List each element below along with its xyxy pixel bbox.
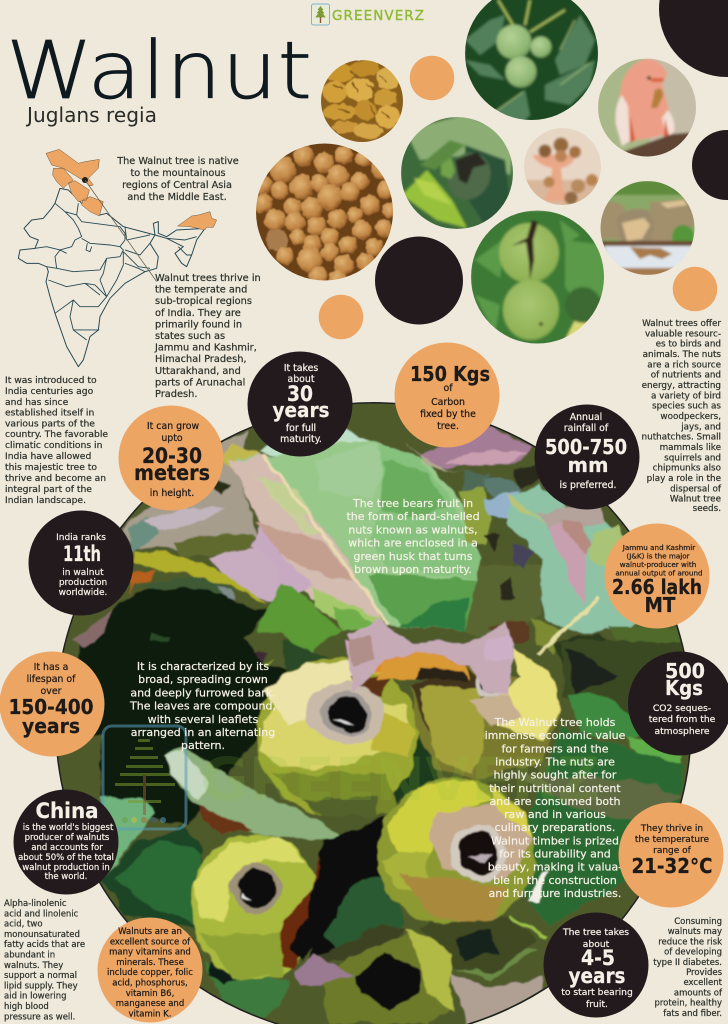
text: economic value: industry. The nuts are (495, 756, 615, 768)
text: introduced to India: Indian landscape. (5, 495, 86, 506)
text: economic value: and are consumed both (490, 795, 620, 808)
text: temperate regions: Jammu and Kashmir, (154, 343, 257, 354)
text: diabetes and nutrition (653, 917, 723, 1019)
text: diabetes and nutrition: of developing (664, 948, 722, 958)
text: resources for birds and animals: are a rich source (647, 360, 721, 370)
text: fatty acids: lipid supply. They (4, 981, 78, 991)
stat: 20-30 meters height: It can grow (147, 421, 199, 432)
decorative circle: orange top (410, 56, 454, 100)
text: native range: regions of Central Asia (122, 180, 232, 191)
text: introduced to India: It was introduced to (5, 375, 97, 386)
stat: 500 kgs CO2 sequestered (628, 652, 728, 756)
text: fruit description: The tree bears fruit in (352, 497, 473, 510)
text: temperate regions: parts of Arunachal (155, 377, 245, 388)
photo: cracked green husks (470, 210, 606, 346)
stat: Jammu and Kashmir 2.66 lakh MT: walnut-producer with (620, 560, 696, 569)
text: economic value: culinary preparations. (495, 821, 615, 834)
text: crown and leaves description (129, 660, 276, 752)
text: temperate regions: primarily found in (155, 319, 242, 330)
text: fatty acids: support a normal (4, 971, 77, 981)
text: fatty acids: monounsaturated (4, 930, 80, 940)
text: resources for birds and animals: of nutrients and (651, 371, 721, 381)
stat: temperature 21-32°C (618, 802, 724, 908)
stat: 150 kgs carbon fixed: tree. (437, 421, 459, 432)
stat: 20-30 meters height: upto (161, 433, 183, 444)
text: diabetes and nutrition: Consuming (674, 917, 722, 927)
text: fatty acids: acid, two (4, 920, 43, 930)
text: temperate regions (154, 273, 261, 400)
text: introduced to India: established itself in (5, 408, 94, 418)
photo: bowl of walnuts (523, 127, 603, 208)
text: resources for birds and animals: jays, and (680, 422, 721, 432)
text: economic value: The Walnut tree holds (494, 716, 616, 729)
stat: vitamins and minerals: Walnuts are an (118, 927, 182, 937)
stat: 20-30 meters height: 20-30 (142, 444, 202, 468)
text: economic value: highly sought after for (494, 769, 617, 782)
stat: vitamins and minerals: excellent source of (110, 937, 191, 947)
stat: 500 kgs CO2 sequestered: tered from the (649, 714, 716, 725)
text: diabetes and nutrition: reduce the risk (658, 937, 722, 947)
text: crown and leaves description: pattern. (181, 739, 225, 752)
stat: annual rainfall 500-750 mm: mm (568, 453, 608, 477)
text: crown and leaves description: It is characterized by its (137, 660, 269, 673)
stat: China biggest producer: and accounts for (31, 843, 103, 853)
decorative circle: orange right (673, 267, 717, 311)
stat: 150 kgs carbon fixed: 150 Kgs (410, 362, 490, 386)
text: economic value: immense economic value (485, 729, 626, 742)
text: introduced to India: India have allowed (5, 451, 91, 462)
text: temperate regions: Pradesh. (155, 389, 197, 400)
stat: vitamins and minerals: many vitamins and (109, 948, 191, 958)
text: fatty acids: acid and linolenic (4, 909, 79, 919)
stat: annual rainfall 500-750 mm (534, 404, 640, 510)
stat: lifespan 150-400 years: years (22, 714, 80, 738)
text: introduced to India: thrive and become an (5, 473, 106, 484)
stat: 20-30 meters height (118, 406, 224, 510)
decorative circle: dark large (375, 236, 463, 324)
text: diabetes and nutrition: walnuts may (668, 927, 722, 937)
stat: lifespan 150-400 years: over (41, 686, 62, 697)
stat: annual rainfall 500-750 mm: is preferred. (560, 480, 616, 491)
text: introduced to India: climatic conditions in (5, 440, 103, 451)
text: crown and leaves description: with several leaflets (148, 713, 259, 726)
decorative circle: dark right (692, 130, 728, 200)
text: economic value: Walnut timber is prized (491, 834, 619, 847)
text: crown and leaves description: broad, spreading crown (138, 673, 268, 686)
text: fatty acids: Alpha-linolenic (4, 899, 67, 909)
text: introduced to India: integral part of the (5, 484, 92, 495)
stat: lifespan 150-400 years: It has a (34, 662, 68, 673)
text: native range: to the mountainous (130, 168, 226, 179)
text: resources for birds and animals: energy, attracting (642, 381, 721, 391)
stat: 20-30 meters height: meters (134, 461, 210, 485)
stat: 4-5 years to fruit: The tree takes (562, 927, 629, 938)
text: resources for birds and animals: nuthatches. Small (642, 433, 721, 443)
decorative circle: orange left (319, 295, 363, 339)
stat: vitamins and minerals: acid, phosphorus, (112, 978, 188, 988)
stat: 150 kgs carbon fixed: Carbon (431, 397, 465, 408)
stat: 4-5 years to fruit: to start bearing (561, 987, 633, 998)
stat: China biggest producer: the world. (45, 872, 87, 882)
text: economic value: ble in the construction (493, 874, 617, 887)
text: resources for birds and animals: es to birds and (656, 340, 721, 350)
stat: India ranks 11th: 11th (63, 542, 101, 566)
decorative circle: dark top right (659, 0, 728, 77)
stat: 150 kgs carbon fixed: of (443, 383, 453, 394)
text: diabetes and nutrition: Provides (686, 968, 723, 978)
stat: vitamins and minerals: minerals. These (116, 958, 184, 968)
text: fruit description: the form of hard-shelled (346, 510, 480, 523)
stat: temperature 21-32°C: 21-32°C (632, 854, 712, 878)
stat: annual rainfall 500-750 mm: Annual (570, 412, 602, 423)
text: economic value: for farmers and the (501, 742, 609, 755)
stat: Jammu and Kashmir 2.66 lakh MT: 2.66 lakh (612, 575, 702, 599)
text: native range: and the Middle East. (127, 192, 227, 203)
stat: 500 kgs CO2 sequestered: Kgs (665, 676, 703, 700)
text: resources for birds and animals: seeds. (693, 504, 721, 514)
stat: Jammu and Kashmir 2.66 lakh MT: annual output of around (615, 568, 703, 578)
subtitle: scientific name: Juglans regia (25, 103, 157, 127)
stat: China biggest producer: walnut production in (22, 863, 110, 873)
stat: 30 years to maturity: 30 (287, 382, 313, 406)
text: fruit description (346, 497, 480, 576)
text: diabetes and nutrition: fats and fiber. (663, 1009, 722, 1019)
text: resources for birds and animals: chipmunks also (653, 464, 721, 474)
stat: 150 kgs carbon fixed: fixed by the (420, 409, 476, 420)
text: native range: The Walnut tree is native (116, 156, 239, 167)
stat: temperature 21-32°C: range of (653, 846, 692, 856)
text: temperate regions: Uttarakhand, and (155, 366, 241, 377)
stat: China biggest producer: about 50% of the total (18, 853, 114, 863)
text: resources for birds and animals: squirrels and (664, 453, 721, 463)
stat: Jammu and Kashmir 2.66 lakh MT: (J&K) is the major (626, 552, 690, 560)
text: diabetes and nutrition: type II diabetes. (653, 958, 722, 968)
stat: annual rainfall 500-750 mm: 500-750 (545, 435, 627, 459)
text: fatty acids: walnuts. They (4, 961, 63, 971)
text: temperate regions: of India. They are (155, 308, 241, 319)
text: resources for birds and animals: species such as (652, 402, 721, 412)
stat: lifespan 150-400 years (0, 652, 104, 756)
text: economic value: their nutritional content (489, 782, 621, 795)
text: fruit description: green husk that turns (354, 550, 473, 563)
stat: Jammu and Kashmir 2.66 lakh MT: MT (644, 593, 676, 617)
title: Walnut (6, 25, 312, 117)
photo: pile of whole walnuts (256, 144, 393, 280)
text: economic value: raw and in various (504, 808, 606, 821)
text: fatty acids: fatty acids that are (4, 940, 85, 950)
text: fruit description: which are enclosed in a (348, 537, 478, 550)
stat: 4-5 years to fruit (544, 912, 648, 1018)
text: crown and leaves description: The leaves are compound, (129, 700, 276, 713)
text: resources for birds and animals (642, 319, 722, 514)
stat: annual rainfall 500-750 mm: rainfall of (564, 423, 609, 434)
text: economic value: beauty, making it valua- (488, 861, 622, 874)
stat: 20-30 meters height: in height. (150, 488, 194, 499)
text: introduced to India (5, 375, 108, 506)
text: temperate regions: Himachal Pradesh, (155, 354, 247, 365)
text: resources for birds and animals: animals. The nuts (643, 350, 721, 360)
stat: vitamins and minerals: vitamin K. (129, 1010, 171, 1020)
stat: 500 kgs CO2 sequestered: atmosphere (654, 726, 710, 737)
text: fruit description: nuts known as walnuts, (348, 523, 478, 536)
watermark: wordmark: GREENVERZ (200, 745, 600, 815)
text: resources for birds and animals: Walnut tree (670, 495, 721, 505)
text: resources for birds and animals: woodpeckers, (660, 412, 721, 422)
text: resources for birds and animals: mammals like (660, 443, 721, 453)
text: resources for birds and animals: play a role in the (647, 474, 721, 484)
stat: 4-5 years to fruit: fruit. (586, 999, 608, 1010)
stat: Jammu and Kashmir 2.66 lakh MT: Jammu and Kashmir (622, 543, 695, 552)
stat: 30 years to maturity: It takes (284, 363, 318, 374)
text: temperate regions: Walnut trees thrive in (155, 273, 261, 284)
stat: lifespan 150-400 years: lifespan of (27, 674, 76, 685)
stat: China biggest producer: China (36, 799, 98, 823)
photo: kernels (320, 59, 404, 143)
stat: India ranks 11th (28, 510, 134, 616)
stat: India ranks 11th: in walnut (62, 568, 104, 578)
text: introduced to India: country. The favorable (5, 429, 108, 440)
stat: 500 kgs CO2 sequestered: 500 (665, 659, 705, 683)
stat: temperature 21-32°C: the temperature (635, 835, 710, 845)
photo: green walnuts on branch (464, 0, 600, 125)
text: resources for birds and animals: a variety of bird (651, 391, 721, 401)
stat: 150 kgs carbon fixed (394, 342, 500, 448)
stat: vitamins and minerals: manganese and (116, 999, 184, 1009)
stat: 30 years to maturity: for full (286, 423, 316, 434)
text: fatty acids: abundant in (4, 950, 55, 960)
text: diabetes and nutrition: amounts of (674, 988, 723, 998)
stat: China biggest producer (14, 790, 118, 894)
text: crown and leaves description: and deeply furrowed bark. (130, 686, 276, 699)
stat: India ranks 11th: India ranks (56, 533, 106, 543)
text: fruit description: brown upon maturity. (354, 563, 472, 576)
watermark: logo mark (103, 726, 186, 829)
photo: sacks of walnuts (598, 180, 698, 276)
text: diabetes and nutrition: protein, healthy (654, 999, 722, 1009)
stat: vitamins and minerals: include copper, folic (107, 968, 193, 978)
text: native range (116, 156, 239, 203)
text: economic value: and furniture industries. (489, 887, 621, 900)
stat: China biggest producer: producer of walnuts (25, 833, 110, 843)
stat: India ranks 11th: worldwide. (59, 588, 107, 598)
text: resources for birds and animals: Walnut trees offer (642, 319, 721, 329)
stat: vitamins and minerals: vitamin B6, (126, 989, 174, 999)
stat: 30 years to maturity (248, 352, 352, 456)
main illustration: walnut fruits and leaves (40, 380, 710, 1024)
text: introduced to India: and has since (5, 397, 69, 408)
text: diabetes and nutrition: excellent (683, 978, 723, 988)
photo: pink cockatoo (597, 58, 700, 160)
text: introduced to India: India centuries ago (5, 386, 94, 397)
text: temperate regions: states such as (155, 331, 225, 342)
map of India (18, 149, 217, 367)
text: introduced to India: various parts of the (5, 418, 95, 430)
text: fatty acids (4, 899, 85, 1022)
stat: 4-5 years to fruit: about (583, 939, 610, 950)
text: fatty acids: aid in lowering (4, 992, 67, 1002)
text: resources for birds and animals: valuable resourc- (645, 329, 721, 339)
stat: 500 kgs CO2 sequestered: CO2 seques- (653, 703, 711, 714)
stat: 4-5 years to fruit: years (568, 964, 626, 988)
stat: 30 years to maturity: about (287, 374, 315, 385)
stat: India ranks 11th: production (59, 578, 107, 588)
text: economic value (485, 716, 626, 900)
stat: 30 years to maturity: years (272, 398, 330, 422)
stat: 4-5 years to fruit: 4-5 (581, 946, 615, 970)
text: economic value: for its durability and (499, 848, 611, 860)
text: fatty acids: high blood (4, 1002, 49, 1012)
text: introduced to India: this majestic tree to (5, 462, 97, 473)
text: temperate regions: the temperate and (155, 285, 247, 296)
stat: Jammu and Kashmir 2.66 lakh MT (604, 524, 710, 628)
text: temperate regions: sub-tropical regions (155, 296, 252, 307)
logo: Greenverz (312, 4, 424, 25)
stat: 30 years to maturity: maturity. (280, 434, 322, 445)
text: resources for birds and animals: dispersal of (670, 484, 722, 494)
stat: vitamins and minerals (98, 918, 202, 1022)
text: crown and leaves description: arranged in an alternating (131, 726, 275, 739)
stat: temperature 21-32°C: They thrive in (640, 824, 703, 834)
logo: Greenverz: GREENVERZ (332, 8, 424, 24)
photo: splitting husk (400, 115, 515, 230)
text: fatty acids: pressure as well. (4, 1012, 75, 1022)
stat: China biggest producer: is the world's biggest (23, 823, 114, 833)
stat: lifespan 150-400 years: 150-400 (8, 695, 94, 719)
